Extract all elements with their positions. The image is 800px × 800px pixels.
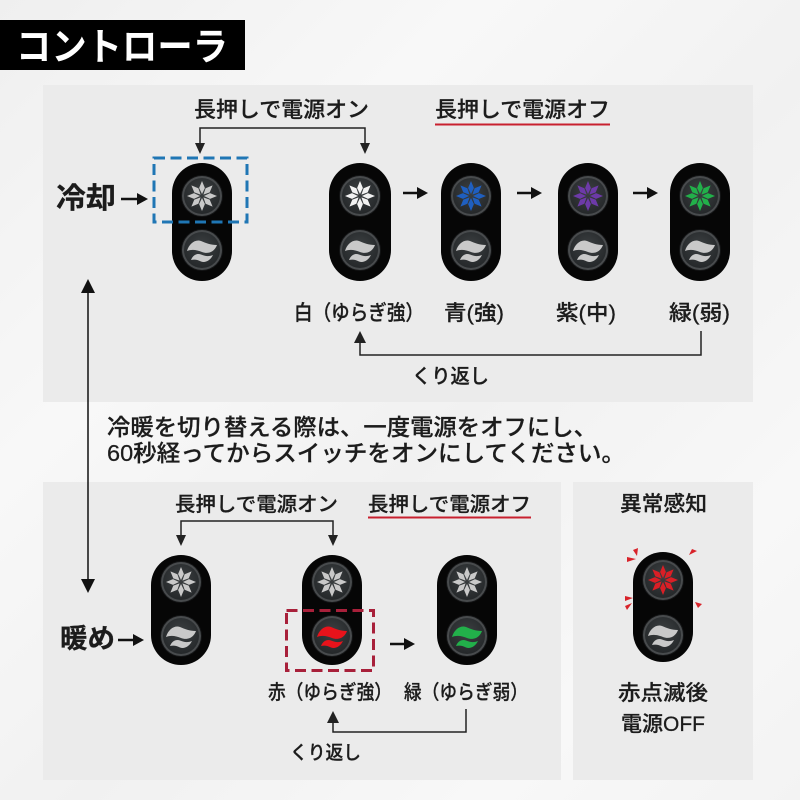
mode labels: heating: 緑（ゆらぎ弱） <box>404 681 528 704</box>
mode labels: cooling: 緑(弱) <box>669 302 730 325</box>
title bar: コントローラ <box>16 27 228 69</box>
text: blink then power off: 電源OFF <box>621 713 705 736</box>
arrow: purple to green <box>633 187 658 199</box>
heading: power on, heating: 長押しで電源オン <box>175 493 338 516</box>
heading: power on, cooling: 長押しで電源オン <box>194 98 369 122</box>
controller: green heating <box>437 555 497 665</box>
panel: abnormality detection <box>573 482 753 780</box>
mode labels: cooling: 白（ゆらぎ強） <box>294 302 424 325</box>
arrow: white to blue <box>403 187 428 199</box>
repeat arrow: heating <box>327 709 466 732</box>
controller: blue <box>441 163 501 281</box>
label: cooling: 冷却 <box>56 182 116 215</box>
panel: heating <box>43 482 561 780</box>
heading: power off, cooling: 長押しで電源オフ <box>435 98 610 122</box>
label: repeat, heating: くり返し <box>290 742 361 764</box>
notice text <box>107 414 625 466</box>
notice text: 冷暖を切り替える際は、一度電源をオフにし、 <box>107 414 597 440</box>
mode labels: cooling: 青(強) <box>444 302 504 325</box>
arrow: red to green <box>390 638 415 650</box>
controller: cooling start <box>172 163 232 281</box>
controller: white <box>329 163 391 281</box>
controller: abnormal red <box>633 552 693 662</box>
mode labels: cooling <box>294 302 730 325</box>
heading: abnormality detection: 異常感知 <box>620 492 707 516</box>
highlight: blue dashed box <box>154 158 247 222</box>
label: heating: 暖め <box>60 624 115 654</box>
panel: cooling <box>43 85 753 402</box>
text: blink then power off <box>618 682 708 736</box>
controller: red <box>302 555 362 665</box>
bracket arrow: power on, cooling <box>195 128 370 154</box>
arrow: blue to purple <box>517 187 542 199</box>
controller: heating start <box>151 555 211 665</box>
label: repeat, cooling: くり返し <box>412 365 489 388</box>
mode labels: cooling: 紫(中) <box>556 302 616 325</box>
repeat arrow: cooling <box>354 331 701 355</box>
text: blink then power off: 赤点滅後 <box>618 682 708 705</box>
heading: power off, heating: 長押しで電源オフ <box>368 493 531 516</box>
highlight: red dashed box <box>286 610 374 670</box>
controller: green <box>670 163 730 281</box>
arrow: heating to controller <box>118 634 144 646</box>
controller: purple <box>558 163 618 281</box>
icon: warning sparks <box>625 548 702 610</box>
mode labels: heating <box>268 681 528 704</box>
double arrow between cooling and heating <box>81 279 95 593</box>
notice text: 60秒経ってからスイッチをオンにしてください。 <box>107 440 625 466</box>
mode labels: heating: 赤（ゆらぎ強） <box>268 681 392 704</box>
arrow: cooling to controller <box>121 193 148 205</box>
bracket arrow: power on, heating <box>176 521 338 546</box>
